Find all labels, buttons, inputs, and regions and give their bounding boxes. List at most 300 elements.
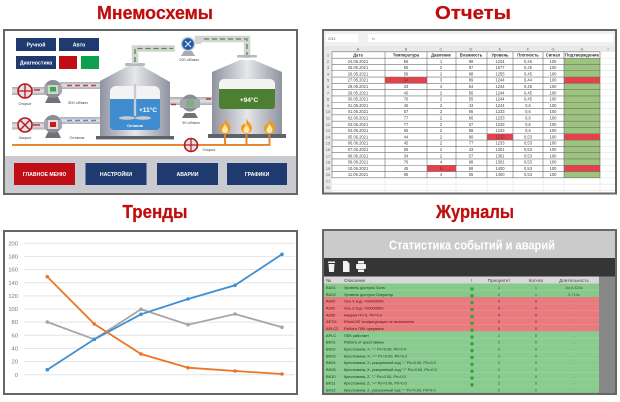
table data: 2	[440, 141, 443, 146]
y axis labels: 40	[12, 346, 18, 352]
journal codes and descriptions: BK12	[326, 388, 336, 392]
journal header row: №	[326, 278, 331, 283]
table data: 31.05.2021	[348, 103, 369, 108]
table data: 0,53	[524, 166, 533, 171]
formula bar: fx	[372, 36, 375, 41]
table data: 100	[550, 71, 557, 76]
icon: heating valve: Открыт	[203, 148, 216, 152]
table data: 1244	[495, 97, 505, 102]
tank 2	[208, 60, 286, 138]
tank 1	[96, 63, 174, 139]
table data: 100	[550, 153, 557, 158]
journal numeric columns: -	[573, 312, 575, 317]
table data: 89	[469, 78, 474, 83]
top pipe with circulation pump: 200 об/мин	[179, 58, 199, 62]
journal numeric columns: 2	[498, 346, 500, 352]
table data: 04.06.2021	[348, 128, 369, 133]
valve and pump labels	[19, 101, 88, 140]
table data: 0,53	[524, 141, 533, 146]
table data: 2	[440, 71, 443, 76]
table data: 43	[469, 147, 474, 152]
y axis labels: 60	[12, 333, 18, 339]
table column titles: Сигнал	[546, 52, 561, 58]
table data: 98	[469, 160, 474, 165]
table data: 05.06.2021	[348, 134, 369, 139]
journal numeric columns: 2	[498, 285, 500, 290]
table data: 0,6	[525, 128, 532, 133]
table data: 2	[440, 65, 443, 70]
panel: trend chart	[4, 231, 297, 394]
table data: 65	[404, 147, 409, 152]
table data: 87	[469, 65, 474, 70]
chart gridlines	[24, 243, 295, 375]
journal numeric columns: 0	[498, 326, 501, 331]
table data: 1301	[495, 147, 505, 152]
table data: 02.06.2021	[348, 116, 369, 120]
table data: 88	[469, 59, 474, 64]
table column titles: Плотность	[517, 52, 539, 58]
table data: 1244	[495, 78, 505, 83]
journal codes and descriptions: BK11	[326, 381, 335, 386]
row and column headers: G	[551, 47, 555, 52]
journal numeric columns: 2	[498, 388, 500, 392]
table data: 26.05.2021	[348, 71, 369, 76]
table column titles: Давление	[431, 52, 452, 58]
journal numeric columns: 1	[535, 285, 537, 290]
journal codes and descriptions: BK05	[326, 367, 336, 372]
journal codes and descriptions: AETH	[326, 319, 337, 324]
table data: 100	[550, 103, 557, 108]
table data: 1244	[495, 84, 505, 89]
table data: 01.06.2021	[348, 109, 369, 114]
table data: 34	[404, 153, 409, 158]
table data: 0,53	[524, 153, 533, 158]
table data: 25.05.2021	[348, 65, 369, 70]
table data: 0,45	[524, 65, 533, 70]
table data: 2	[440, 116, 443, 120]
status cells	[385, 58, 600, 178]
journal numeric columns: 0	[535, 374, 538, 379]
journal numeric columns: 0	[535, 333, 538, 338]
table data: 29.05.2021	[348, 90, 369, 95]
table data: 08.06.2021	[348, 153, 369, 158]
journal numeric columns: 0	[535, 388, 538, 392]
journal numeric columns: 0	[535, 299, 538, 304]
table data: 1233	[495, 122, 505, 127]
table data: 54	[404, 78, 409, 83]
table data: 1577	[495, 65, 505, 70]
table column titles: Влажность	[460, 52, 483, 58]
toolbar	[324, 258, 615, 276]
menu buttons: НАСТРОЙКИ	[100, 170, 132, 178]
table column titles: Подтверждение	[565, 52, 600, 58]
journal codes and descriptions: Уровень доступа Гость	[344, 285, 385, 290]
table data: 3	[440, 78, 443, 83]
journal numeric columns: 2	[498, 333, 500, 338]
table data: 10.06.2021	[348, 166, 369, 171]
journal numeric columns: 2	[498, 367, 500, 372]
y axis labels	[8, 241, 18, 379]
table data: 76	[404, 160, 409, 165]
journal numeric columns	[498, 285, 583, 392]
valve and pump labels: 500 об/мин	[68, 101, 88, 105]
journal codes and descriptions: BK02	[326, 346, 336, 352]
row and column headers: 16	[326, 147, 331, 152]
row and column headers: H	[581, 47, 584, 52]
row and column headers: B	[405, 47, 408, 52]
row and column headers: 2	[327, 59, 330, 64]
row and column headers: 18	[326, 160, 331, 165]
table data: 0,44	[524, 78, 533, 83]
table data: 100	[550, 59, 557, 64]
icon: printer	[356, 261, 366, 272]
table data: 1244	[495, 103, 505, 108]
journal codes and descriptions: EtherCAT конфигурация не выполнена	[344, 319, 415, 324]
table data: 4	[440, 160, 443, 165]
y axis labels: 100	[8, 307, 18, 313]
table data: 58	[404, 71, 409, 76]
row and column headers: 4	[327, 71, 330, 76]
journal codes and descriptions: Крестовина, Z, ускоренный ход "-" Px=0.00, Ph=0.0	[344, 388, 436, 392]
journal numeric columns: -	[573, 388, 575, 392]
journal numeric columns: -	[573, 299, 575, 304]
table data: 44	[404, 134, 409, 139]
menu buttons: АВАРИИ	[177, 172, 199, 178]
series: gray	[46, 308, 284, 341]
row and column headers: 17	[326, 153, 331, 158]
journal numeric columns: 0	[498, 312, 501, 317]
table data: 55	[469, 97, 474, 102]
journal codes and descriptions: ПЛК работает	[344, 333, 369, 338]
journal numeric columns: 2	[498, 360, 500, 365]
menu buttons: ГЛАВНОЕ МЕНЮ	[23, 172, 67, 178]
journal codes and descriptions	[326, 285, 438, 392]
table data: 88	[469, 71, 474, 76]
journal codes and descriptions: BU01	[326, 285, 336, 290]
journal codes and descriptions: Работа ПЛК прервана	[344, 326, 385, 331]
journal numeric columns: 9.714с	[568, 292, 580, 297]
journal codes and descriptions: Крестовина, Z, "+" Px=0.00, Ph=0.0	[344, 381, 408, 386]
journal numeric columns: -	[573, 360, 575, 365]
table data: 0,45	[524, 84, 533, 89]
y axis labels: 160	[8, 268, 18, 274]
table data: 4	[440, 84, 443, 89]
row and column headers: 5	[327, 78, 330, 83]
journal codes and descriptions: Крестовина, X, ускоренный ход "-" Px=0.00, Ph=0.0	[344, 360, 437, 365]
table data: 1301	[495, 160, 505, 165]
journal numeric columns: 0	[535, 353, 538, 358]
journal numeric columns: 0	[535, 367, 538, 372]
table data: 06.06.2021	[348, 141, 369, 146]
journal numeric columns: 0	[535, 340, 538, 345]
journal numeric columns: 0	[498, 306, 501, 310]
journal numeric columns: 2	[498, 340, 500, 345]
table data: 0,53	[524, 172, 533, 177]
table data: 5	[440, 166, 443, 171]
icon: heating valve	[184, 138, 216, 152]
menu buttons	[14, 163, 287, 185]
row and column headers: 10	[326, 109, 331, 114]
valve and pump labels: Останов	[70, 136, 84, 140]
top pipe with circulation pump	[135, 38, 257, 64]
table data: 56	[404, 59, 409, 64]
journal numeric columns: -	[573, 346, 575, 352]
journal numeric columns: -	[573, 340, 575, 345]
table data: 88	[469, 166, 474, 171]
table data: 100	[550, 141, 557, 146]
table data: 2	[440, 97, 443, 102]
row and column headers: D	[470, 47, 473, 52]
journal row backgrounds	[324, 284, 599, 393]
journal numeric columns: 0	[535, 360, 538, 365]
table data: 100	[550, 147, 557, 152]
table data: 2	[440, 147, 443, 152]
table data: 1233	[495, 116, 505, 120]
table data: 0,6	[525, 122, 532, 127]
mode buttons: Диагностика	[20, 60, 52, 66]
table data: 4	[440, 172, 443, 177]
table data: 1301	[495, 153, 505, 158]
table data: 2	[440, 134, 443, 139]
journal header row: Кол-во	[529, 278, 544, 283]
title: Мнемосхемы: Мнемосхемы	[97, 3, 213, 23]
journal numeric columns: 2	[498, 353, 500, 358]
journal codes and descriptions: BK03	[326, 353, 336, 358]
table data: 66	[469, 109, 474, 114]
y axis labels: 80	[12, 320, 18, 326]
table data: 45	[404, 141, 409, 146]
panel: spreadsheet report	[323, 30, 616, 194]
table data: 100	[550, 109, 557, 114]
journal status dots	[470, 288, 474, 390]
row and column headers: 22	[326, 185, 331, 190]
mode buttons: Ручной	[27, 42, 45, 48]
table data: 77	[404, 122, 409, 127]
journal codes and descriptions: Крестовина, Z, "-" Px=0.00, Ph=0.0	[344, 374, 407, 379]
table data: 2	[440, 128, 443, 133]
table data: 1	[440, 59, 443, 64]
tank 1: Останов	[127, 124, 144, 128]
empty sheet cells	[332, 58, 615, 192]
table data: 0,45	[524, 71, 533, 76]
journal codes and descriptions: BK01	[326, 340, 336, 345]
table data: 45	[404, 166, 409, 171]
table data: 2	[440, 153, 443, 158]
row and column headers: I	[607, 47, 609, 52]
table data: 09.06.2021	[348, 160, 369, 165]
journal header row: !	[471, 278, 472, 283]
y axis labels: 180	[8, 254, 18, 260]
table data: 1244	[495, 90, 505, 95]
row and column headers: 19	[326, 166, 331, 171]
table data: 76	[404, 97, 409, 102]
table data: 100	[550, 160, 557, 165]
series: blue	[46, 252, 284, 372]
table data: 2	[440, 90, 443, 95]
tank 2: +94°C	[240, 96, 258, 104]
table data: 0,45	[524, 90, 533, 95]
table column titles	[353, 52, 600, 58]
journal codes and descriptions: BK04	[326, 360, 336, 365]
y axis labels: 20	[12, 360, 18, 366]
journal codes and descriptions: A002	[326, 306, 335, 310]
table grid	[332, 52, 600, 178]
table data: 11.06.2021	[348, 172, 369, 177]
panel: mnemonic diagram	[4, 30, 297, 194]
row and column headers: 1	[327, 52, 330, 58]
table data: 67	[469, 122, 474, 127]
table data: 46	[404, 90, 409, 95]
y axis labels: 0	[15, 373, 18, 379]
table data: 1400	[495, 166, 505, 171]
journal numeric columns: 0	[535, 326, 538, 331]
journal numeric columns: -	[573, 319, 575, 324]
journal numeric columns: 0	[535, 306, 538, 310]
formula bar: G31	[328, 36, 336, 41]
icon: export file	[343, 261, 350, 272]
row and column headers: 20	[326, 172, 331, 177]
journal numeric columns: 0	[535, 346, 538, 352]
row and column headers: 21	[326, 178, 331, 184]
journal numeric columns: 1	[535, 292, 537, 297]
title: Отчеты: Отчеты	[435, 3, 511, 23]
y axis labels: 200	[8, 241, 18, 247]
table data: 57	[404, 109, 409, 114]
tank 1: +11°C	[139, 106, 157, 114]
panel: event journal	[323, 230, 616, 394]
journal header row	[324, 276, 599, 284]
table data: 100	[550, 172, 557, 177]
journal numeric columns: 2	[498, 374, 500, 379]
table data: 55	[404, 65, 409, 70]
table data: 66	[469, 116, 474, 120]
row and column headers: 3	[327, 65, 330, 70]
row and column headers: F	[527, 47, 530, 52]
table data	[348, 59, 557, 177]
journal header row: Длительность	[559, 278, 589, 283]
journal numeric columns: -	[573, 306, 575, 310]
menu buttons: ГРАФИКИ	[245, 172, 270, 178]
table data: 100	[550, 78, 557, 83]
table data: 24.05.2021	[348, 59, 369, 64]
mode buttons	[16, 38, 99, 69]
icon: pump 2	[44, 115, 62, 138]
table data: 100	[550, 116, 557, 120]
table data: 1255	[495, 71, 505, 76]
table data: 56	[469, 90, 474, 95]
table data: 0,53	[524, 134, 533, 139]
table data: 54	[469, 84, 474, 89]
journal numeric columns: 0	[535, 319, 538, 324]
valve and pump labels: Закрыт	[19, 136, 32, 140]
row and column headers: 6	[327, 84, 330, 89]
table data: 100	[550, 84, 557, 89]
middle pipe and pump: 90 об/мин	[182, 121, 200, 125]
table column titles: Температура	[393, 52, 420, 58]
table data: 88	[469, 128, 474, 133]
y axis labels: 140	[8, 281, 18, 287]
table data: 100	[550, 97, 557, 102]
row and column headers: A	[357, 47, 360, 52]
table data: 0,6	[525, 103, 532, 108]
table data: 100	[550, 134, 557, 139]
row and column headers: C	[440, 47, 443, 52]
table data: 0,53	[524, 160, 533, 165]
icon: trash	[328, 262, 335, 272]
table data: 55	[469, 172, 474, 177]
table data: 100	[550, 122, 557, 127]
journal codes and descriptions: A00X	[326, 299, 336, 304]
journal header row: Описание	[344, 278, 366, 283]
table data: 1233	[495, 134, 505, 139]
valve and pump labels: Открыт	[19, 102, 32, 106]
table data: 77	[404, 116, 409, 120]
journal numeric columns: -	[573, 374, 575, 379]
journal codes and descriptions: Крестовина, X, "+" Px=0.00, Ph=0.0	[344, 353, 408, 358]
journal numeric columns: 0	[535, 381, 538, 386]
journal codes and descriptions: Крестовина, X, "-" Px=0.00, Ph=0.0	[344, 346, 407, 352]
row and column headers: 12	[326, 122, 331, 127]
journal codes and descriptions: APLC	[326, 333, 336, 338]
table data: 30.05.2021	[348, 97, 369, 102]
journal title band: Статистика событий и аварий	[389, 238, 555, 252]
table data: 0,45	[524, 59, 533, 64]
table data: 33	[404, 84, 409, 89]
journal numeric columns: -	[573, 333, 575, 338]
table data: 100	[550, 166, 557, 171]
table data: 86	[404, 172, 409, 177]
journal codes and descriptions: APLC2	[326, 326, 338, 331]
bottom menu band	[5, 156, 296, 193]
table data: 65	[404, 128, 409, 133]
table data: 1400	[495, 172, 505, 177]
table data: 2	[440, 103, 443, 108]
journal codes and descriptions: Авария ПЧ S, Ph=0.0	[344, 312, 383, 317]
journal codes and descriptions: Крестовина, X, ускоренный ход "+" Px=0.00, Ph=0.0	[344, 367, 438, 372]
heating line with flames	[12, 118, 275, 146]
journal numeric columns: -	[573, 381, 575, 386]
table data: 27.05.2021	[348, 78, 369, 83]
table data: 2	[440, 122, 443, 127]
table column titles: Уровень	[491, 52, 509, 58]
journal numeric columns: 2м 8.423с	[565, 285, 583, 290]
row and column headers: 11	[326, 116, 331, 120]
table data: 77	[469, 141, 474, 146]
row and column headers: 15	[326, 141, 331, 146]
table data: 07.06.2021	[348, 147, 369, 152]
table data: 43	[469, 103, 474, 108]
journal numeric columns: -	[573, 326, 575, 331]
row and column headers: 8	[327, 97, 330, 102]
table data: 1233	[495, 141, 505, 146]
journal codes and descriptions: Ось Z код: >00000000	[344, 306, 384, 310]
y axis labels: 120	[8, 294, 18, 300]
journal codes and descriptions: BK10	[326, 374, 336, 379]
row and column headers: 7	[327, 90, 330, 95]
formula bar	[324, 31, 615, 46]
journal numeric columns: -	[573, 353, 575, 358]
row and column headers: 14	[326, 134, 331, 139]
table data: 1233	[495, 109, 505, 114]
journal codes and descriptions: Работа от крестовины	[344, 340, 384, 345]
journal codes and descriptions: BU02	[326, 292, 336, 297]
table data: 100	[550, 128, 557, 133]
series: orange	[46, 275, 284, 376]
row and column headers: 9	[327, 103, 330, 108]
journal codes and descriptions: A005	[326, 312, 335, 317]
journal numeric columns: -	[573, 367, 575, 372]
table data: 28.05.2021	[348, 84, 369, 89]
